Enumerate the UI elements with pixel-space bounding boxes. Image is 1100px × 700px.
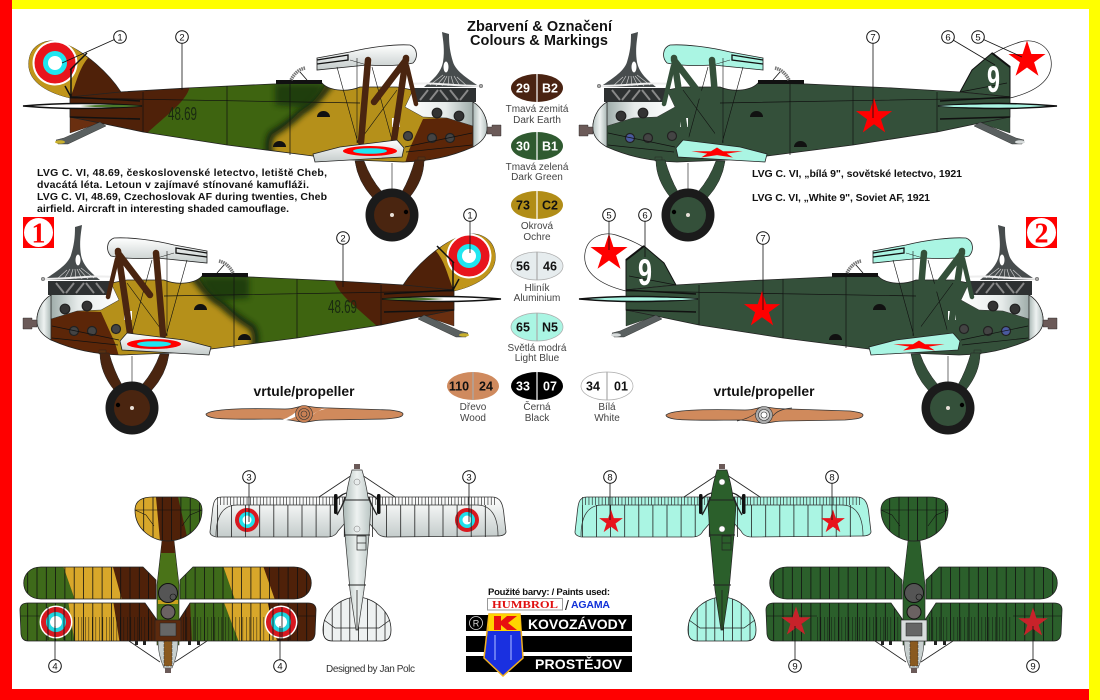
callouts: plan views: 8 (607, 472, 613, 484)
paint swatch: ochre: Ochre (523, 232, 551, 243)
paint swatch: black: 07 (543, 380, 557, 394)
paint swatch: ochre: C2 (542, 198, 558, 212)
caption: aircraft 1: dvacátá léta. Letoun v zajímavé stínované kamufláži. (37, 179, 309, 191)
paint swatch: dark earth: Tmavá zemitá (506, 104, 569, 115)
badge: scheme 1 (23, 217, 54, 250)
callouts: side views: 1 (467, 210, 473, 222)
caption: aircraft 1 (37, 167, 327, 215)
aircraft 1 side view, lower: Czechoslovak 48.69 (23, 225, 501, 434)
paints used and maker logo (466, 587, 632, 676)
paint swatch: wood: 110 (449, 380, 469, 394)
underside view: aircraft 2 (575, 464, 871, 641)
callouts: plan views: 3 (246, 472, 252, 484)
aircraft 1 side view, upper: Czechoslovak 48.69: 48.69 (168, 104, 197, 124)
paint swatch: dark green: 30 (516, 140, 530, 154)
paint swatch: white: Bílá (598, 402, 616, 413)
paint swatch: dark earth: 29 (516, 82, 530, 96)
paint swatch: white: 01 (614, 380, 628, 394)
underside view: aircraft 1 (210, 464, 506, 641)
paint swatch: dark green: Tmavá zelená (506, 162, 569, 173)
paint swatch: black: 33 (516, 380, 530, 394)
callouts: side views (62, 31, 1022, 310)
paint swatch: white (581, 372, 633, 424)
paint swatch: ochre (511, 191, 563, 243)
callouts: plan views (49, 471, 1039, 672)
paint swatch: dark earth: Dark Earth (513, 115, 561, 126)
paint swatch: light blue: N5 (542, 320, 558, 334)
callouts: side views: 2 (340, 234, 346, 244)
aircraft 2 side view, lower: Soviet White 9: 9 (638, 252, 652, 293)
paint swatch: aluminium: 46 (543, 260, 557, 274)
badge: scheme 1: 1 (32, 218, 46, 250)
callouts: plan views: 4 (277, 662, 283, 672)
paint swatch: light blue: Light Blue (515, 353, 560, 364)
title: Colours & Markings (470, 33, 608, 49)
roundels on top wing (40, 606, 298, 640)
callouts: plan views: 3 (466, 472, 472, 484)
aircraft 1 side view, lower: Czechoslovak 48.69: 48.69 (328, 297, 357, 317)
paint swatch: dark earth (506, 74, 569, 126)
paint swatch: light blue (508, 313, 567, 364)
callouts: side views: 6 (642, 210, 648, 222)
title: Zbarvení & Označení (467, 19, 613, 35)
caption: aircraft 1: airfield. Aircraft in interesting shaded camouflage. (37, 203, 289, 215)
paints used and maker logo: AGAMA (571, 599, 610, 611)
callouts: side views: 6 (945, 32, 951, 44)
paint swatch: light blue: Světlá modrá (508, 343, 567, 354)
paint swatch: dark green: Dark Green (511, 172, 563, 183)
paint swatch: black: Black (525, 413, 550, 424)
propeller: aircraft 1: vrtule/propeller (254, 383, 355, 399)
paints used and maker logo: HUMBROL (492, 600, 558, 611)
paint swatch: aluminium: Aluminium (514, 293, 560, 304)
propeller: aircraft 2 (666, 383, 863, 424)
designer credit: Designed by Jan Polc (326, 664, 415, 675)
top view: aircraft 2 green (764, 497, 1064, 673)
paints used and maker logo: KOVOZÁVODY (528, 616, 628, 632)
paint swatch: white: 34 (586, 380, 600, 394)
paints used and maker logo: / (565, 597, 569, 613)
aircraft 2 side view, lower: Soviet White 9 (579, 225, 1057, 434)
paint swatch: ochre: Okrová (521, 221, 554, 232)
caption: aircraft 2: LVG C. VI, „White 9", Soviet AF, 1921 (752, 192, 930, 204)
caption: aircraft 2: LVG C. VI, „bílá 9", sovětské letectvo, 1921 (752, 168, 962, 180)
paint swatch: white: White (594, 413, 620, 424)
callouts: plan views: 4 (52, 662, 58, 672)
paint swatch: aluminium (511, 252, 563, 304)
caption: aircraft 1: LVG C. VI, 48.69, československé letectvo, letiště Cheb, (37, 167, 327, 179)
paint swatch: dark green: B1 (542, 140, 558, 154)
aircraft 2 side view, upper: Soviet White 9: 9 (987, 59, 1000, 100)
callouts: side views: 2 (179, 32, 185, 44)
callouts: side views: 1 (117, 32, 123, 44)
paint swatch: wood: Dřevo (460, 402, 487, 413)
paints used and maker logo: Použité barvy: / Paints used: (488, 587, 610, 598)
callouts: side views: 7 (870, 32, 876, 44)
paints used and maker logo: PROSTĚJOV (535, 655, 623, 672)
paint swatch: ochre: 73 (516, 198, 530, 212)
callouts: side views: 5 (975, 32, 981, 44)
caption: aircraft 2 (752, 168, 962, 204)
paint swatch: wood (447, 372, 499, 424)
callouts: side views: 5 (606, 210, 612, 222)
callouts: plan views: 9 (1030, 662, 1036, 672)
badge: scheme 2 (1026, 217, 1057, 250)
callouts: side views: 7 (760, 234, 766, 244)
caption: aircraft 1: LVG C. VI, 48.69, Czechoslovak AF during twenties, Cheb (37, 191, 327, 203)
paint swatch: wood: 24 (479, 380, 493, 394)
title (467, 19, 613, 49)
aircraft 2 side view, upper: Soviet White 9 (579, 32, 1057, 242)
paint swatch: light blue: 65 (516, 320, 530, 334)
callouts: plan views: 8 (829, 472, 835, 484)
propeller: aircraft 1 (206, 383, 403, 422)
aircraft 1 side view, upper: Czechoslovak 48.69 (23, 32, 501, 242)
paints used and maker logo: R (473, 618, 480, 628)
paint swatch: wood: Wood (460, 413, 486, 424)
badge: scheme 2: 2 (1034, 218, 1048, 250)
paint swatch: black: Černá (523, 400, 551, 413)
paint swatch: dark green (506, 132, 569, 183)
paint swatch: aluminium: 56 (516, 260, 530, 274)
propeller: aircraft 2: vrtule/propeller (714, 383, 815, 399)
paint swatch: aluminium: Hliník (524, 283, 550, 294)
callouts: plan views: 9 (792, 662, 798, 672)
top view: aircraft 1 camouflage (18, 497, 318, 673)
paint swatch: dark earth: B2 (542, 82, 558, 96)
paint swatch: black (511, 372, 563, 424)
